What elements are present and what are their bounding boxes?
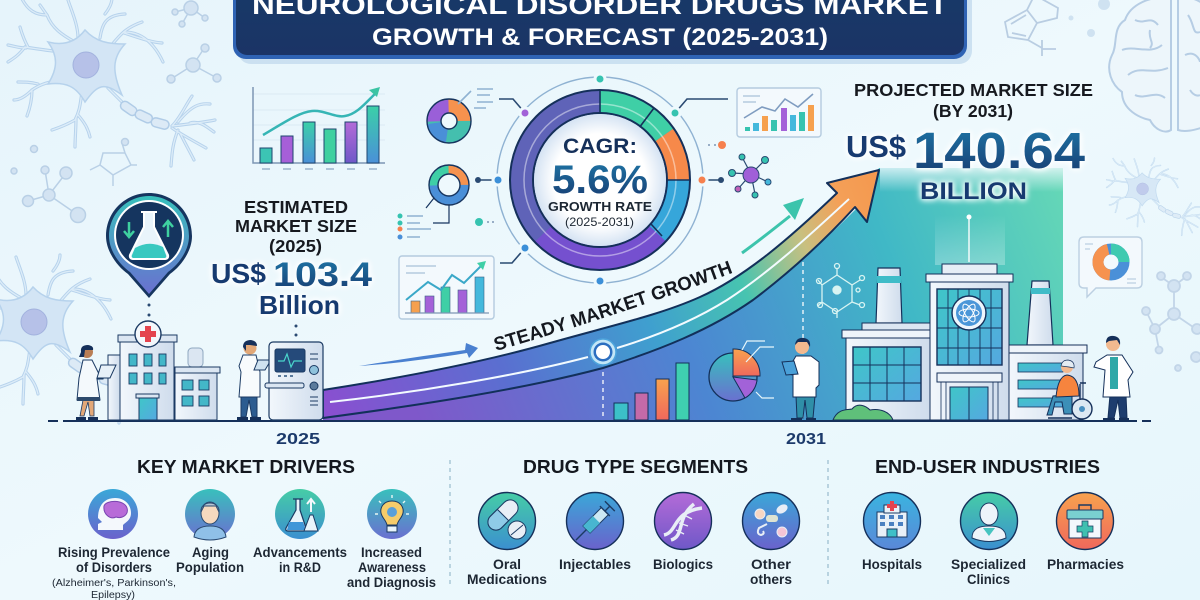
icon: syringe [566,492,624,550]
label: specialized clinics [951,557,1026,587]
mini bar chart in area [614,363,689,420]
heading: DRUG TYPE SEGMENTS [523,457,748,477]
label: oral medications: Oral [493,557,521,572]
text: growth rate: GROWTH RATE [548,199,652,214]
label: biologics: Biologics [653,557,713,572]
decoration: neuron lower left [0,255,163,423]
label: advancements [253,545,347,575]
label: hospitals: Hospitals [862,557,922,572]
chimney right [1027,281,1053,345]
section dividers [450,460,828,588]
label: rising prevalence [52,545,176,600]
chart card right upper [737,88,821,137]
label: increased awareness: and Diagnosis [347,575,436,590]
icon: other drugs [742,492,800,550]
icon: pills [478,492,536,550]
projected market size block [846,80,1093,205]
value: billion: Billion [259,290,340,320]
label: market size: MARKET SIZE [235,216,357,236]
small purple-blue arrow [359,343,478,366]
label: year: (2025) [269,236,322,256]
icon: head with brain [88,489,138,539]
heading: KEY MARKET DRIVERS [137,457,355,477]
pie chart in area [709,341,774,401]
decoration: molecules left [11,1,221,222]
left wing [842,323,930,420]
text: 5.6%: 5.6% [552,158,648,202]
light beam [935,214,1005,265]
text: period: (2025-2031) [565,215,634,229]
light fade over area top [880,166,1064,192]
label: injectables: Injectables [559,557,631,572]
decoration: large neuron top left [8,0,215,166]
icon: flasks [275,489,325,539]
title banner [233,0,972,64]
icon: map pin with flask [106,193,192,298]
label: rising prevalence: of Disorders [76,560,152,575]
label: advancements: Advancements [253,545,347,560]
doctor and medical machine [237,340,323,420]
value: 140.64: 140.64 [913,122,1086,179]
donut chart lower [398,165,469,240]
decoration: dots top right [1068,0,1110,37]
year label 2025: 2025 [276,431,320,448]
label: pharmacies: Pharmacies [1047,557,1124,572]
label: aging population: Aging [192,545,229,560]
ground line [48,420,1151,422]
arrow label: STEADY MARKET GROWTH [494,260,732,350]
label: oral medications [467,557,547,587]
value: currency: US$ [846,129,906,164]
estimated market size block [211,197,372,320]
main tower [926,264,1013,420]
label: other others: Other [751,557,792,572]
label: estimated: ESTIMATED [244,197,348,217]
person with laptop [76,345,116,420]
panel: key market drivers [52,457,436,600]
label: projected: PROJECTED MARKET SIZE [854,80,1093,100]
chart card left lower [399,256,494,319]
network molecule icon [728,154,771,198]
doctor right [1094,336,1133,421]
icon: first aid kit [1056,492,1114,550]
label: aging population: Population [176,560,244,575]
growth gradient area [323,168,1063,420]
decoration: molecule lower right [1142,272,1200,371]
label: increased awareness: Increased [361,545,422,560]
text: CAGR: CAGR: [563,135,637,158]
label: rising prevalence: Rising Prevalence [58,545,170,560]
factory and hospital building [833,264,1087,420]
ring connector nodes [475,74,728,286]
panel: end-user industries [862,457,1124,587]
connector dots [148,304,298,336]
patient in wheelchair [1047,360,1092,419]
value: currency: US$ [211,258,266,289]
decoration: hexagon molecule top right [1005,0,1058,56]
icon: elderly person [185,489,235,540]
label: oral medications: Medications [467,572,547,587]
heading: END-USER INDUSTRIES [875,457,1100,477]
label: other others: others [750,572,792,587]
icon: DNA helix [654,492,712,550]
label: other others [750,557,792,587]
label: increased awareness: Awareness [358,560,426,575]
year label 2031: 2031 [786,431,826,448]
dashed year markers [603,262,803,420]
donut chart upper [427,89,493,143]
machine [265,342,323,420]
molecule in gradient area [816,264,864,318]
chimney left [876,268,902,323]
icon: light bulb [367,489,417,539]
decoration: brain top right [1109,0,1200,132]
speech bubble with donut [1079,237,1142,297]
label: specialized clinics: Specialized [951,557,1026,572]
value: 103.4: 103.4 [273,256,372,294]
small teal arrow [742,198,804,253]
label: rising prevalence: (Alzheimer's, Parkinson's, [52,577,176,589]
CAGR ring chart [497,77,703,283]
doctor [237,340,271,420]
label: specialized clinics: Clinics [967,572,1010,587]
bar chart top left [253,87,385,169]
label: increased awareness [347,545,436,590]
doctor with clipboard [782,338,819,421]
label: advancements: in R&D [279,560,321,575]
label: aging population [176,545,244,575]
left hospital building [108,321,220,420]
decoration: small neuron right [1107,158,1200,235]
label: by 2031: (BY 2031) [933,101,1013,121]
growth arrow [323,170,879,418]
icon: hospital [864,492,920,550]
value: billion: BILLION [920,178,1027,205]
title line 2: GROWTH & FORECAST (2025-2031) [372,24,828,51]
bush [833,405,893,420]
icon: doctor portrait [960,492,1018,550]
right wing [1009,345,1087,420]
panel: drug type segments [467,457,800,587]
